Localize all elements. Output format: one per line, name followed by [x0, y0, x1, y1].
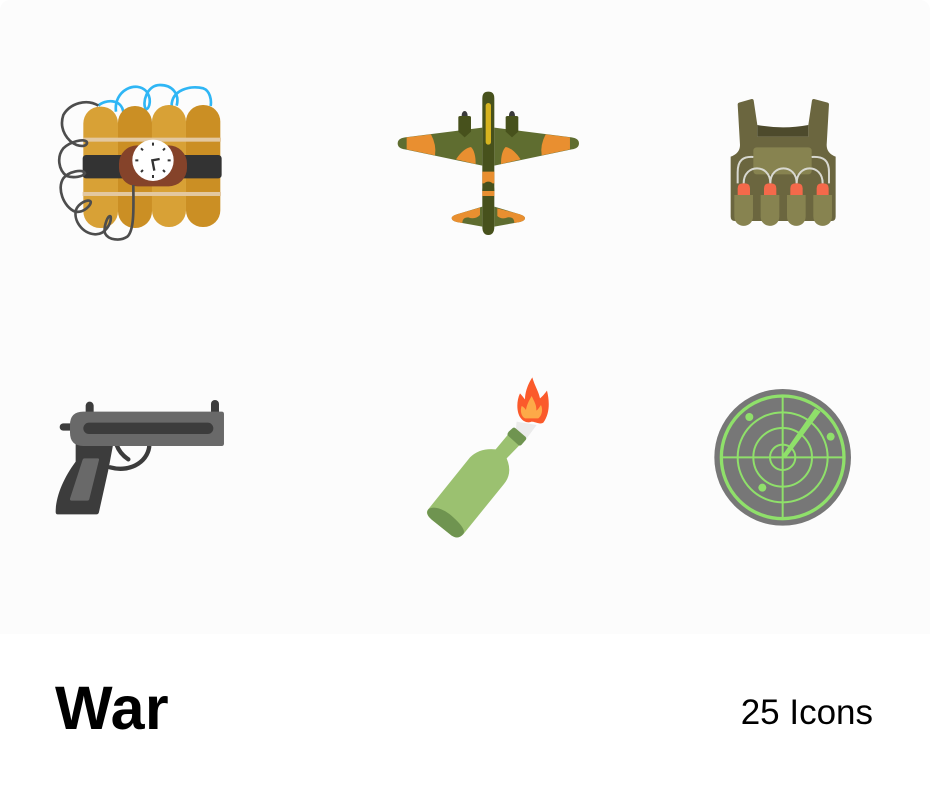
icon: bomb vest	[731, 99, 836, 226]
icon: radar screen	[714, 389, 851, 526]
icon: pistol	[56, 400, 224, 514]
icon count: 25 Icons	[741, 693, 873, 732]
title: War	[55, 674, 169, 742]
icon: molotov cocktail	[427, 377, 549, 537]
icon: bomber plane	[398, 92, 579, 235]
icon: dynamite bomb	[59, 85, 222, 240]
